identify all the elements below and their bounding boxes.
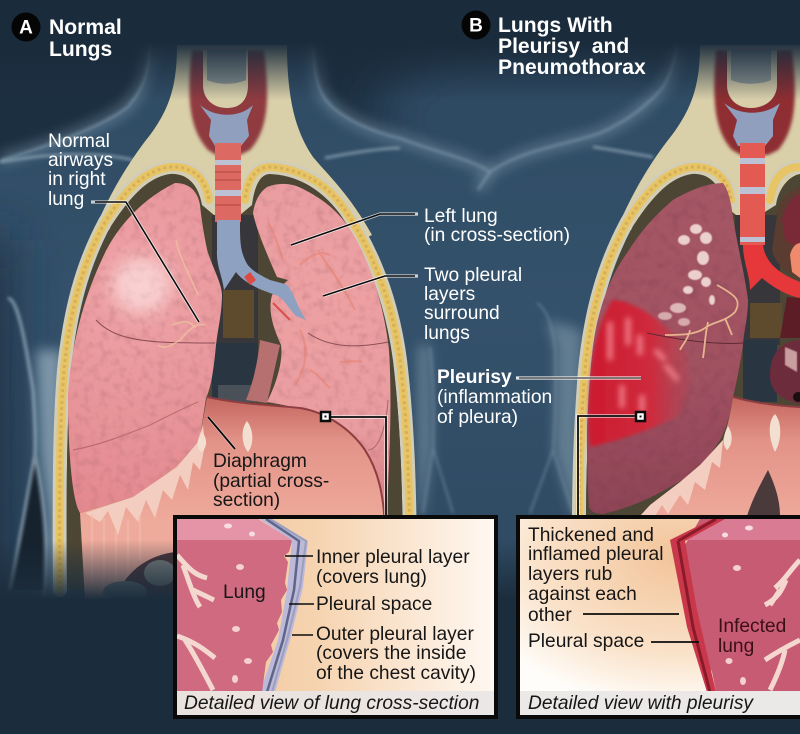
diaphragm tendon drops bbox=[198, 421, 252, 452]
label: normal airways: Normal bbox=[48, 131, 110, 152]
lung with pleurisy bbox=[587, 183, 748, 514]
label: diaphragm bbox=[213, 451, 329, 511]
connector: detail A bbox=[321, 412, 386, 516]
airways A bbox=[177, 555, 215, 690]
connector: detail B bbox=[578, 412, 645, 516]
leader: pleural layers bbox=[323, 276, 418, 296]
heading A: Normal bbox=[49, 16, 122, 39]
inset A leaders bbox=[285, 556, 314, 635]
label: normal airways: lung bbox=[48, 189, 84, 210]
leader: left lung bbox=[291, 214, 418, 245]
leader: diaphragm bbox=[208, 417, 235, 449]
label: two pleural layers: layers bbox=[424, 284, 475, 305]
mediastinum A bbox=[212, 215, 258, 402]
infected lung tissue bbox=[685, 519, 800, 692]
inset B labels: inflamed pleural bbox=[528, 544, 663, 565]
mediastinum B bbox=[735, 215, 782, 402]
panel B: chest illustration bbox=[579, 45, 800, 590]
rib band B bbox=[579, 167, 800, 590]
label: diaphragm: section) bbox=[213, 490, 280, 511]
inset B labels: against each bbox=[528, 584, 637, 605]
label: normal airways: in right bbox=[48, 169, 106, 190]
leader: normal airways bbox=[91, 202, 199, 322]
inset B labels: other bbox=[528, 605, 572, 626]
lung base edge A bbox=[368, 400, 388, 450]
inset A: lung cross-section detail bbox=[175, 517, 496, 717]
label: normal airways bbox=[48, 131, 113, 210]
left lung A lower lobe behind bbox=[246, 340, 280, 403]
inset A labels: Pleural space bbox=[316, 594, 432, 615]
inset B labels: lung bbox=[718, 636, 754, 657]
inset B labels: Pleural space bbox=[528, 631, 644, 652]
label: pleurisy: (inflammation bbox=[437, 387, 552, 408]
cavity A bbox=[67, 174, 403, 590]
right lung A bbox=[68, 183, 222, 513]
thickened pleural layers bbox=[670, 519, 725, 692]
diaphragm and muscle A bbox=[80, 397, 385, 603]
label: diaphragm: Diaphragm bbox=[213, 451, 307, 472]
clavicle highlights bbox=[0, 147, 653, 162]
inset A labels bbox=[223, 547, 476, 684]
heading B: Lungs With bbox=[498, 14, 613, 37]
label: left lung bbox=[424, 206, 570, 246]
label: normal airways: airways bbox=[48, 150, 113, 171]
heading B: B bbox=[469, 16, 483, 36]
inset B labels: Infected bbox=[718, 616, 786, 637]
left torso strip bbox=[36, 350, 62, 600]
heading B: Pleurisy and bbox=[498, 35, 629, 58]
left lung A bbox=[253, 184, 390, 530]
heading A: Lungs bbox=[49, 38, 112, 61]
label: two pleural layers: Two pleural bbox=[424, 265, 522, 286]
center strips bbox=[418, 320, 582, 515]
cavity B bbox=[586, 174, 800, 590]
heading A: A bbox=[19, 18, 33, 38]
white scarring patches bbox=[658, 224, 715, 326]
neck area A bbox=[98, 45, 372, 260]
label: pleurisy bbox=[437, 367, 552, 428]
inset B labels: layers rub bbox=[528, 564, 612, 585]
heading B bbox=[462, 10, 646, 79]
heading A bbox=[12, 12, 122, 61]
airways B bbox=[765, 560, 800, 690]
diaphragm tendon drops B bbox=[724, 414, 780, 452]
neck area B bbox=[620, 45, 800, 260]
rib band A bbox=[60, 167, 410, 590]
inset B labels: Thickened and bbox=[528, 525, 654, 546]
inset B leaders bbox=[583, 614, 699, 642]
label: two pleural layers bbox=[424, 265, 522, 344]
diaphragm fringe A bbox=[85, 425, 205, 535]
heading B: Pneumothorax bbox=[498, 56, 646, 79]
label: two pleural layers: surround bbox=[424, 303, 500, 324]
trachea and larynx B bbox=[714, 50, 800, 298]
inset B caption: Detailed view with pleurisy bbox=[528, 693, 754, 714]
inflamed red patch bbox=[588, 300, 690, 447]
panel A: chest illustration bbox=[60, 45, 410, 603]
diaphragm fringe B bbox=[640, 440, 723, 516]
dark gap left bbox=[10, 455, 46, 590]
lung tissue A bbox=[177, 519, 292, 692]
label: pleurisy: of pleura) bbox=[437, 407, 518, 428]
inset A labels: (covers the inside bbox=[316, 643, 466, 664]
inset A labels: of the chest cavity) bbox=[316, 663, 476, 684]
leader: pleurisy bbox=[516, 376, 641, 380]
label: left lung: Left lung bbox=[424, 206, 498, 227]
pleural layers A bbox=[260, 519, 308, 692]
inset A labels: Inner pleural layer bbox=[316, 547, 470, 568]
inset A labels: Outer pleural layer bbox=[316, 624, 474, 645]
inset A labels: (covers lung) bbox=[316, 567, 427, 588]
diaphragm B bbox=[640, 397, 800, 516]
inset A caption: Detailed view of lung cross-section bbox=[184, 693, 479, 714]
inset B labels bbox=[528, 525, 786, 657]
label: pleurisy: Pleurisy bbox=[437, 367, 512, 388]
label: left lung: (in cross-section) bbox=[424, 225, 570, 246]
trachea and larynx A bbox=[189, 50, 306, 320]
heart and vessels B bbox=[770, 187, 800, 404]
inset A labels: Lung bbox=[223, 582, 266, 603]
inset B: pleurisy detail bbox=[518, 517, 800, 717]
label: diaphragm: (partial cross- bbox=[213, 471, 329, 492]
label: two pleural layers: lungs bbox=[424, 323, 470, 344]
